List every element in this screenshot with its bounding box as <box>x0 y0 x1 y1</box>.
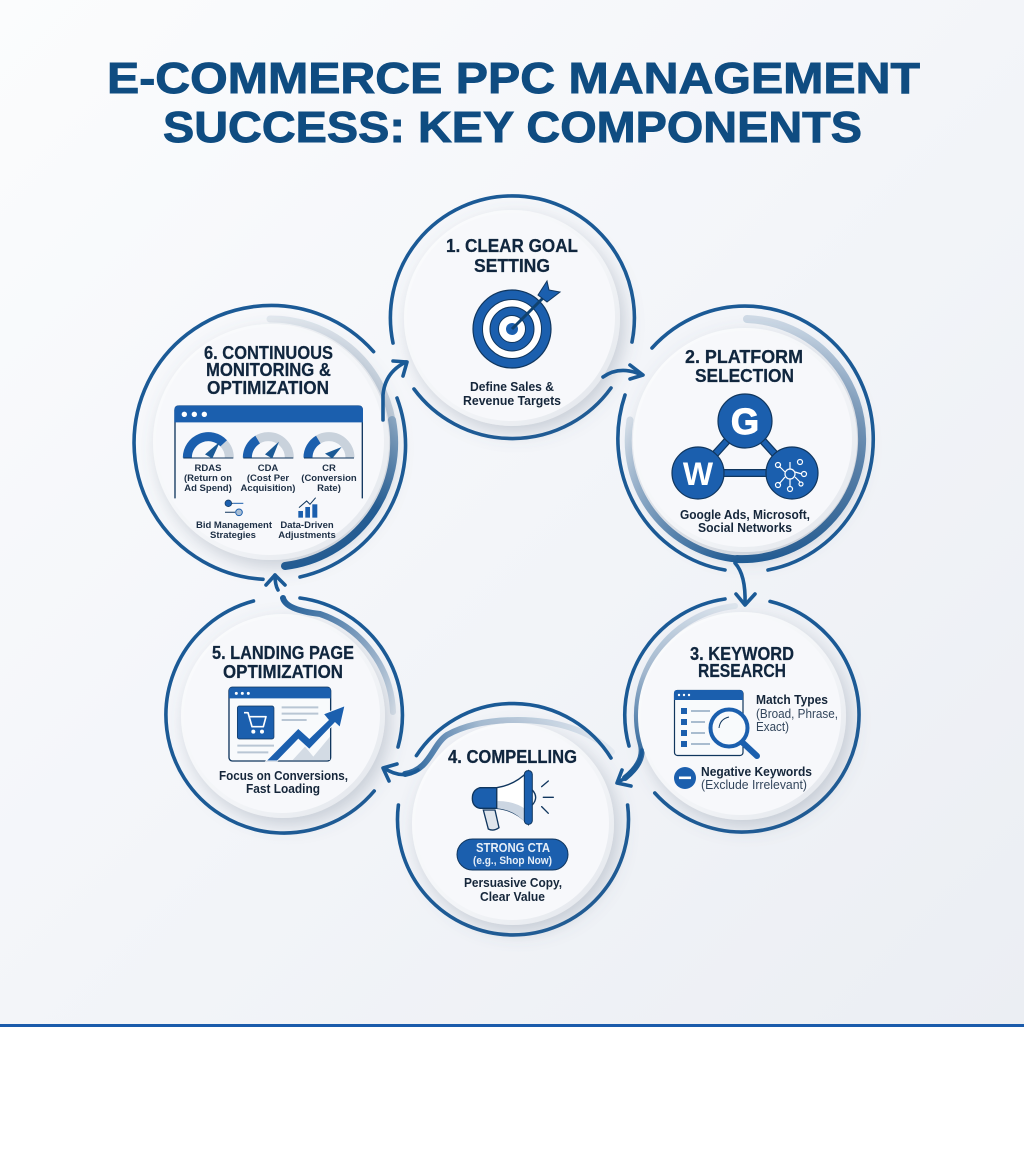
heading 2: SELECTION <box>695 366 794 386</box>
icon: keyword window with magnifier <box>674 690 757 756</box>
title: E-COMMERCE PPC MANAGEMENT <box>107 54 920 103</box>
caption 5: Focus on Conversions, <box>219 769 348 783</box>
footer rule <box>0 1024 1024 1027</box>
heading 2 <box>685 347 803 386</box>
ring 6 <box>134 306 406 579</box>
caption 5: Fast Loading <box>246 782 320 796</box>
caption 4: Persuasive Copy, <box>464 876 562 890</box>
metric: CDA: CDA <box>258 463 278 474</box>
heading 5 <box>212 643 354 682</box>
arrow: 6 to 1 <box>383 361 407 420</box>
negative keywords text: (Exclude Irrelevant) <box>701 778 807 792</box>
heading 5: OPTIMIZATION <box>223 662 343 682</box>
label: bid management <box>196 520 273 541</box>
metric: CDA: Acquisition) <box>241 483 295 494</box>
heading 3: 3. KEYWORD <box>690 644 794 664</box>
icon: target with arrow <box>473 281 560 368</box>
heading 1 <box>446 236 578 276</box>
ring 1 <box>390 196 634 439</box>
disc 4 <box>412 723 614 925</box>
metric: CR: (Conversion <box>301 473 357 484</box>
caption 4: Clear Value <box>480 890 545 904</box>
disc 5 <box>181 614 385 818</box>
disc 6 <box>153 324 389 560</box>
label: data-driven: Data-Driven <box>280 520 334 531</box>
button: strong CTA: STRONG CTA <box>476 841 550 855</box>
caption 2 <box>680 508 810 535</box>
dashboard with gauges <box>174 406 363 518</box>
panel: 3 keyword research <box>625 599 859 832</box>
icon: platform network: W <box>683 456 714 492</box>
match types text: Exact) <box>756 720 789 734</box>
heading 1: 1. CLEAR GOAL <box>446 236 578 256</box>
heading 4: 4. COMPELLING <box>448 747 577 767</box>
heading 5: 5. LANDING PAGE <box>212 643 354 663</box>
icon: megaphone <box>472 771 553 830</box>
heading 1: SETTING <box>474 256 550 276</box>
arrow: 4 to 5 <box>383 764 418 781</box>
arrow: 1 to 2 <box>603 365 643 379</box>
metric: CR: Rate) <box>317 483 341 494</box>
caption 1: Define Sales & <box>470 380 554 394</box>
caption 1: Revenue Targets <box>463 394 561 408</box>
icon: landing page with growth arrow <box>229 687 345 761</box>
label: bid management: Strategies <box>210 530 256 541</box>
heading 6: OPTIMIZATION <box>207 378 329 398</box>
negative keywords text <box>701 765 812 792</box>
icon: platform network <box>672 394 818 499</box>
metric: CDA: (Cost Per <box>247 473 289 484</box>
caption 5 <box>219 769 348 796</box>
heading 6 <box>204 343 333 398</box>
caption 4 <box>464 876 562 904</box>
icon: platform network: G <box>731 401 759 442</box>
title <box>107 54 920 152</box>
match types text: Match Types <box>756 693 828 707</box>
metric: RDAS: (Return on <box>184 473 232 484</box>
caption 2: Google Ads, Microsoft, <box>680 508 810 522</box>
icon: minus <box>674 767 696 789</box>
match types text: (Broad, Phrase, <box>756 707 838 721</box>
panel: 6 continuous monitoring and optimization <box>134 306 406 579</box>
ring 5 <box>166 598 402 833</box>
caption 1 <box>463 380 561 408</box>
metric: CDA <box>241 463 295 494</box>
metric: CR: CR <box>322 463 336 474</box>
arrow: 3 to 4 <box>617 750 642 786</box>
button: strong CTA: (e.g., Shop Now) <box>473 855 552 867</box>
button: strong CTA <box>457 839 568 870</box>
panel: 4 compelling <box>397 704 629 935</box>
heading 2: 2. PLATFORM <box>685 347 803 367</box>
disc 1 <box>404 210 620 426</box>
heading 3: RESEARCH <box>698 661 786 681</box>
metric: RDAS <box>184 463 232 494</box>
ring 3 <box>625 599 859 832</box>
heading 3 <box>690 644 794 681</box>
ring 4 <box>397 704 629 935</box>
title: SUCCESS: KEY COMPONENTS <box>163 103 862 152</box>
heading 6: 6. CONTINUOUS <box>204 343 333 363</box>
gradient swooshes behind discs <box>270 319 862 778</box>
panel: 2 platform selection <box>618 306 873 570</box>
metric: RDAS: Ad Spend) <box>184 483 232 494</box>
label: data-driven <box>278 520 336 541</box>
negative keywords text: Negative Keywords <box>701 765 812 779</box>
metric: RDAS: RDAS <box>195 463 221 474</box>
caption 2: Social Networks <box>698 521 792 535</box>
arrow: 5 to 6 <box>266 575 285 590</box>
panel: 5 landing page optimization <box>166 598 402 833</box>
arrow: 2 to 3 <box>735 563 755 605</box>
match types text <box>756 693 838 734</box>
ring 2 <box>618 306 873 570</box>
label: bid management: Bid Management <box>196 520 273 531</box>
metric: CR <box>301 463 357 494</box>
label: data-driven: Adjustments <box>278 530 336 541</box>
disc 2 <box>633 328 857 552</box>
heading 6: MONITORING & <box>206 360 331 380</box>
panel: 1 clear goal setting <box>390 196 634 439</box>
disc 3 <box>638 612 846 820</box>
